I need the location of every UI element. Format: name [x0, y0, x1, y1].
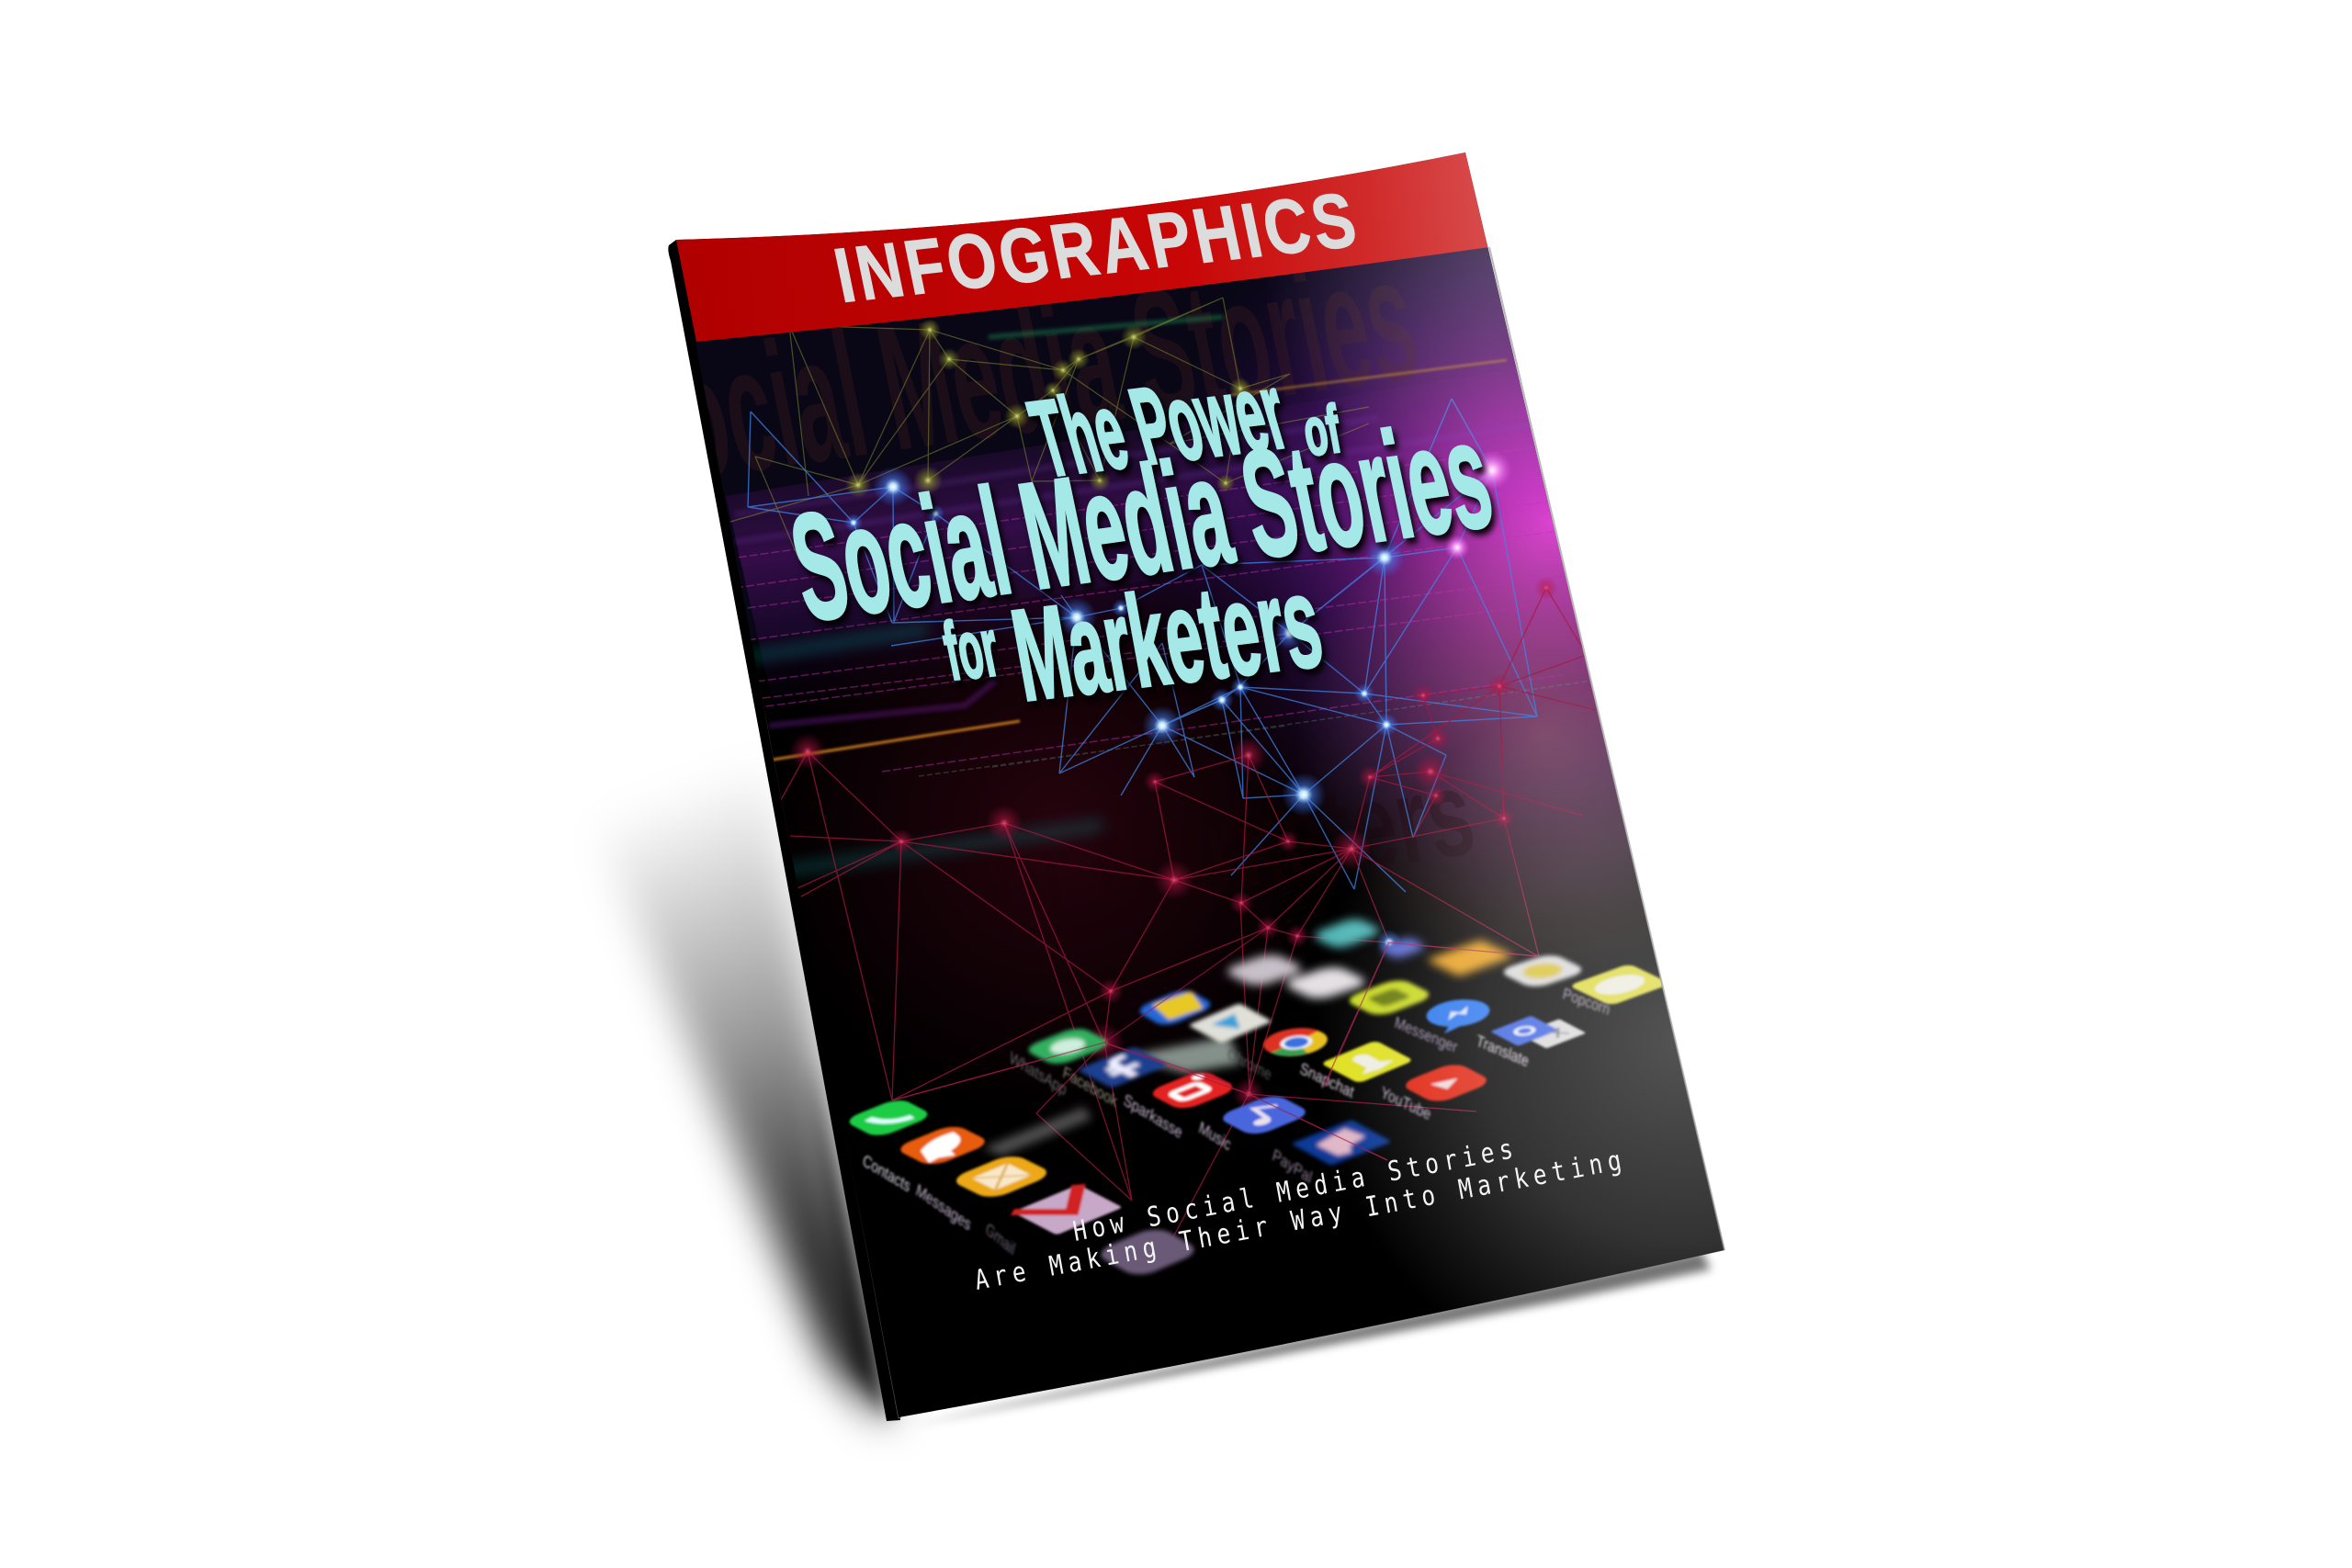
phone app icons, front rows: [842, 964, 1671, 1235]
main title: [778, 349, 1504, 728]
booklet spine: [668, 240, 900, 1421]
subtitle line 1: How Social Media Stories: [1070, 1134, 1515, 1248]
title line: for Marketers: for: [936, 603, 1006, 697]
icon: purple blob: [1092, 1225, 1203, 1279]
network: glowing nodes: [789, 319, 1558, 1111]
title line: The Power of: [1018, 349, 1346, 500]
gloss highlights: [1259, 0, 2049, 1405]
app labels: Gmail: [984, 1219, 1017, 1259]
app labels: YouTube: [1379, 1083, 1432, 1124]
app labels: Messenger: [1393, 1013, 1459, 1057]
right page edge highlight: [1489, 247, 1724, 1250]
title line: for Marketers: Marketers: [1002, 547, 1331, 728]
icon: star app: [1134, 987, 1216, 1028]
network: red nodes and links: [776, 588, 1596, 1249]
network: olive nodes and links: [730, 298, 1369, 560]
icon: Contacts phone: [842, 1097, 934, 1139]
icon: Translate: [1490, 1010, 1586, 1054]
app labels: Translate: [1475, 1032, 1531, 1071]
icon: YouTube: [1398, 1062, 1494, 1104]
heading: INFOGRAPHICS: INFOGRAPHICS: [828, 176, 1367, 319]
cover artwork background: [676, 152, 1724, 1417]
icon: orange app: [1426, 940, 1514, 976]
title line: The Power of: The Power: [1018, 349, 1299, 500]
title line: for Marketers: [936, 547, 1331, 728]
app labels: [861, 985, 1611, 1259]
light streaks: [717, 317, 1599, 871]
icon: white round app: [1221, 952, 1307, 988]
app labels: Contacts: [861, 1151, 912, 1196]
app labels: Snapchat: [1298, 1059, 1356, 1102]
phone app icons, back rows (blurred): [1221, 917, 1514, 1001]
icon: play store: [1188, 1003, 1272, 1043]
app labels: Facebook: [1061, 1063, 1119, 1111]
icon: teal app: [1309, 917, 1385, 950]
icon: round yellow app: [1497, 953, 1589, 989]
network: blue nodes and links: [748, 399, 1537, 892]
icon: Messenger: [1408, 994, 1502, 1034]
app labels: WhatsApp: [1008, 1047, 1069, 1100]
app labels: Sparkasse: [1122, 1090, 1184, 1143]
icon: Messages fish: [893, 1123, 992, 1168]
left cast shadow of the booklet: [588, 735, 889, 1426]
icon: Sparkasse: [1146, 1069, 1239, 1111]
icon: Chrome: [1251, 1022, 1340, 1062]
ghost background title: for Marketers: [952, 743, 1485, 953]
subtitle: [972, 1134, 1623, 1297]
icon: Facebook: [1077, 1047, 1169, 1088]
phone app icons, mid rows (slightly blurred): [1022, 953, 1589, 1279]
app labels: Music: [1197, 1118, 1233, 1155]
wallpaper highlight: [983, 1036, 1240, 1156]
ghost background title: [603, 218, 1485, 953]
title line: The Power of: of: [1297, 390, 1346, 469]
subtitle line 2: Are Making Their Way Into Marketing: [972, 1145, 1623, 1297]
booklet cover: [676, 152, 1724, 1417]
app labels: Chrome: [1226, 1044, 1273, 1084]
icon: yellow app: [1342, 977, 1436, 1018]
ghost background title: Social Media Stories: [603, 218, 1431, 524]
title line: Social Media Stories: Social Media Stories: [778, 389, 1504, 654]
app labels: Messages: [914, 1180, 973, 1235]
icon: white clock app: [1280, 964, 1372, 1001]
icon: Gmail: [1012, 1185, 1123, 1235]
lower cast shadow near spine: [808, 1056, 888, 1422]
icon: multicolour app: [1378, 937, 1428, 959]
icon: mail: [948, 1153, 1055, 1201]
app labels: Popcorn: [1561, 985, 1611, 1020]
icon: Popcorn: [1568, 964, 1671, 1006]
icon: Snapchat: [1320, 1040, 1414, 1084]
red top band: [676, 152, 1489, 342]
icon: WhatsApp: [1022, 1025, 1114, 1067]
icon: Music: [1216, 1093, 1313, 1137]
bottom-edge shadow: [910, 1251, 1711, 1426]
icon: PayPal: [1291, 1120, 1392, 1166]
app labels: PayPal: [1271, 1145, 1314, 1188]
network links over the phone: [892, 928, 1538, 1160]
